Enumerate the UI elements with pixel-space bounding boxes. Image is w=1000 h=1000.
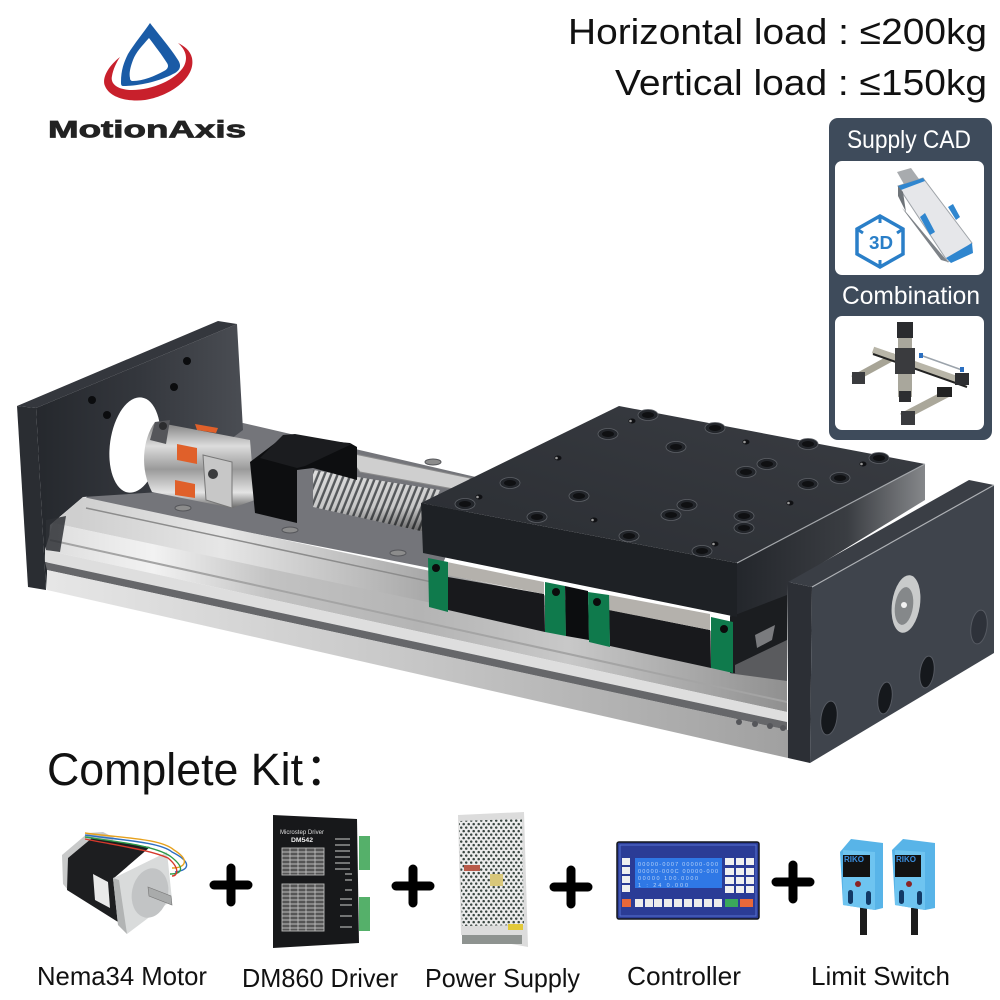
kit item: DM860 driver xyxy=(242,815,398,993)
label: DM860 Driver: DM860 Driver xyxy=(242,963,398,993)
middle band xyxy=(45,523,787,712)
driver body xyxy=(273,815,359,948)
coupling xyxy=(144,420,255,508)
kit item: power supply xyxy=(425,812,580,993)
sensor left xyxy=(840,839,883,935)
base plate behind rail xyxy=(83,423,480,570)
plate side xyxy=(788,582,812,763)
sensor right: RIKO xyxy=(896,855,916,864)
motor wires xyxy=(85,833,187,876)
label: Power Supply: Power Supply xyxy=(425,963,580,993)
controller screen xyxy=(635,858,722,888)
plus xyxy=(776,865,810,899)
light edge xyxy=(45,550,787,722)
driver current table xyxy=(282,848,324,931)
kit item: controller: 00000-000C 00000-000 xyxy=(638,869,718,875)
motor rear cap xyxy=(62,832,115,890)
label: Limit Switch: Limit Switch xyxy=(811,961,950,991)
supply inner components xyxy=(490,874,503,886)
carriage side and interior xyxy=(730,464,925,680)
panel heading: Supply CAD: Supply CAD xyxy=(847,126,971,154)
heading: complete kit: Complete Kit xyxy=(47,744,303,795)
kit item: controller: 00000 100.0000 xyxy=(638,876,698,882)
plate bore xyxy=(104,394,166,496)
plus xyxy=(214,868,248,902)
plate mounting holes xyxy=(819,609,989,736)
icon: 3D cube xyxy=(857,216,903,267)
carriage xyxy=(421,406,925,681)
card: gantry combination xyxy=(835,316,984,430)
lower band xyxy=(47,570,788,758)
supply case xyxy=(458,812,528,947)
t-slot dots xyxy=(736,719,786,731)
kit item: limit switch xyxy=(811,839,950,991)
left end plate xyxy=(17,321,243,590)
card: CAD model xyxy=(835,161,984,275)
motor body xyxy=(67,838,150,922)
CAD linear module xyxy=(897,168,973,263)
kit item: controller xyxy=(617,842,759,991)
kit item: Nema34 motor xyxy=(37,832,207,991)
base plate screws xyxy=(175,459,441,556)
motor front flange xyxy=(113,852,172,934)
dark shadow on rail start xyxy=(46,516,66,552)
label: Nema34 Motor: Nema34 Motor xyxy=(37,961,207,991)
plate top edge xyxy=(788,480,994,587)
linear guide block left xyxy=(428,558,566,636)
logo swoosh xyxy=(104,43,192,100)
panel: CAD and combination xyxy=(829,118,992,440)
rear rail xyxy=(345,452,470,492)
upper ridge xyxy=(53,497,787,680)
kit item: DM860 driver: DM542 xyxy=(291,838,314,844)
panel heading: Combination: Combination xyxy=(842,282,980,310)
carriage front edge xyxy=(421,503,737,617)
logo droplet xyxy=(121,23,180,86)
ball screw xyxy=(313,470,440,532)
aluminium profile rail xyxy=(45,497,788,758)
plus xyxy=(554,870,588,904)
logo wordmark: MotionAxis xyxy=(48,116,246,144)
bearing boss xyxy=(888,573,924,635)
linear guide block right xyxy=(588,592,733,673)
gantry axes xyxy=(852,322,969,425)
plate side edge xyxy=(17,406,46,590)
plus xyxy=(396,869,430,903)
plate inner face xyxy=(36,324,243,590)
heading: complete kit: ： xyxy=(305,744,350,795)
plate top edge xyxy=(17,321,237,408)
plate holes xyxy=(88,357,191,419)
driver terminals xyxy=(359,836,370,870)
motor shaft xyxy=(148,887,172,905)
coupling orange spiders xyxy=(175,424,218,498)
sensor left: RIKO xyxy=(844,855,864,864)
carriage top plate xyxy=(421,406,925,563)
logo: MotionAxis xyxy=(48,23,246,144)
motor label xyxy=(93,874,110,908)
controller F keys xyxy=(622,858,630,892)
driver pin legend xyxy=(335,839,352,927)
small pin holes xyxy=(476,418,866,546)
screw bearing block xyxy=(250,434,357,523)
sensor right xyxy=(892,839,935,935)
supply perforation xyxy=(459,819,524,926)
counterbored holes xyxy=(455,410,889,556)
controller bottom keys xyxy=(622,899,753,907)
controller keypad xyxy=(725,858,754,893)
icon: 3D cube: 3D xyxy=(869,233,893,253)
controller body xyxy=(617,842,759,919)
supply terminals xyxy=(462,935,522,944)
main product: ball screw linear module xyxy=(17,321,994,763)
right end plate xyxy=(788,480,994,763)
heading: horizontal load: Horizontal load : ≤200kg xyxy=(568,11,987,52)
heading: vertical load: Vertical load : ≤150kg xyxy=(615,62,987,103)
plate face xyxy=(810,485,994,763)
driver titles: Microstep Driver xyxy=(280,829,325,836)
kit item: controller: 00000-0007 00000-000 xyxy=(638,862,718,868)
kit item: controller: 1 : 24 0.000 xyxy=(638,883,688,889)
groove xyxy=(45,562,787,730)
label: Controller: Controller xyxy=(627,961,741,991)
